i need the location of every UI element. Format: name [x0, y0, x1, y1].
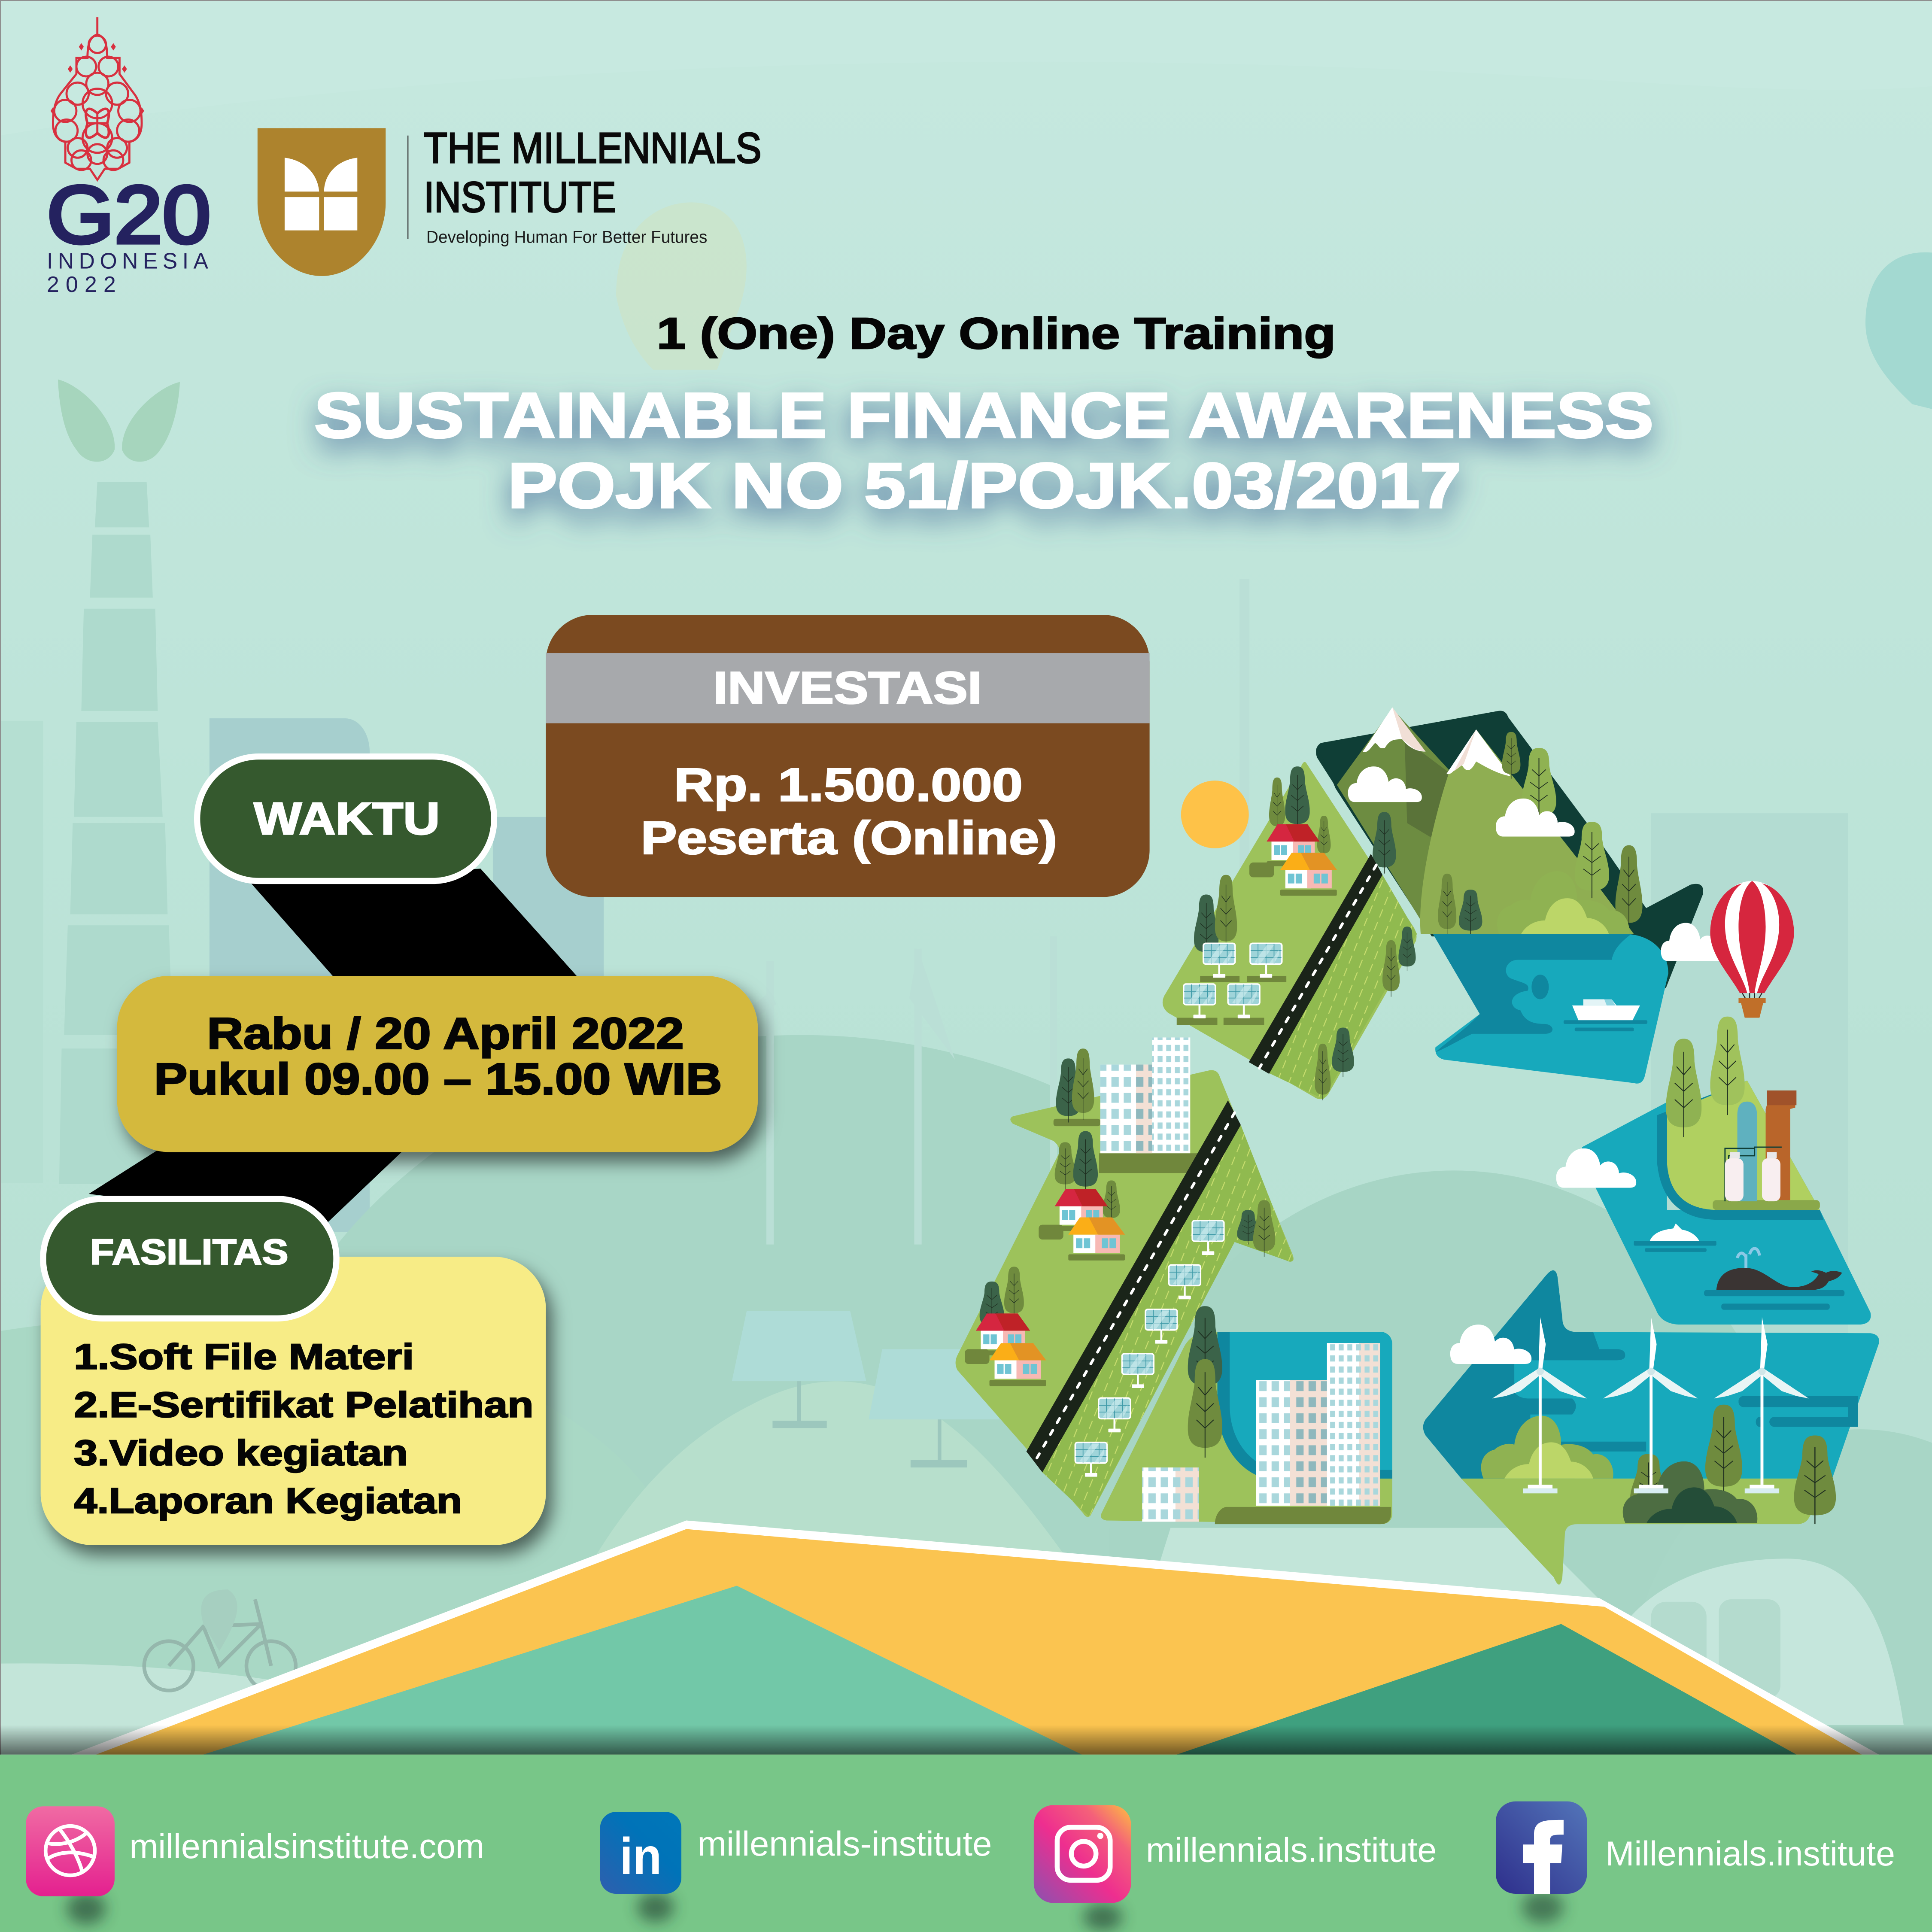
arrow: wind farm — [1423, 1270, 1879, 1585]
water stripes — [1738, 1396, 1858, 1427]
social: facebook: Millennials.institute — [1605, 1835, 1895, 1873]
icon: dolphin — [1634, 1224, 1716, 1252]
background: car — [1602, 1558, 1904, 1725]
arrow: hillside with road — [1163, 762, 1417, 1100]
lake — [1433, 934, 1668, 1084]
background: smokestack and leaves — [58, 380, 180, 1184]
panel: investasi — [546, 615, 1150, 897]
label: waktu: WAKTU — [254, 793, 440, 844]
foreground mountains — [71, 1520, 1879, 1755]
icon: whale — [1704, 1249, 1844, 1310]
block: city by the water — [1101, 1306, 1392, 1524]
icon: hot air balloon — [1710, 881, 1794, 1018]
participant type: Peserta (Online) — [641, 812, 1057, 864]
social: website: millennialsinstitute.com — [129, 1827, 484, 1866]
social: linkedin: in — [620, 1827, 662, 1885]
icon: sun — [1181, 781, 1249, 848]
background: bicycle — [144, 1589, 296, 1691]
fasilitas pill — [43, 1199, 336, 1318]
Millennials Institute logo — [258, 124, 762, 276]
social: instagram — [1034, 1805, 1437, 1931]
background: hot air balloon — [1865, 252, 1932, 409]
background: wind turbines — [653, 579, 1249, 1245]
social: instagram: millennials.institute — [1146, 1831, 1437, 1869]
subtitle: 1 (One) Day Online Training — [657, 308, 1336, 358]
facilities list: 1.Soft File Materi — [74, 1337, 414, 1376]
price: Rp. 1.500.000 — [674, 759, 1023, 811]
fasilitas pill: FASILITAS — [90, 1232, 289, 1272]
background: sun glow — [616, 202, 747, 370]
facilities list: 4.Laporan Kegiatan — [74, 1481, 462, 1521]
trees — [1194, 766, 1416, 1100]
panel: fasilitas — [41, 1199, 546, 1545]
icon: camera — [1057, 1827, 1110, 1880]
social: website — [26, 1806, 484, 1925]
tagline: Developing Human For Better Futures — [426, 227, 707, 246]
wordmark line one: THE MILLENNIALS — [424, 124, 762, 172]
main title: SUSTAINABLE FINANCE AWARENESS — [314, 380, 1653, 451]
background: hills — [0, 1035, 1932, 1932]
tower buildings — [1054, 1037, 1210, 1173]
background: buildings — [0, 718, 1848, 1343]
mountains — [1337, 707, 1634, 934]
land with factory — [1657, 1017, 1823, 1220]
label: waktu — [197, 756, 494, 881]
arrow: road and city — [956, 1037, 1294, 1517]
trees — [980, 1048, 1275, 1331]
social: linkedin — [600, 1812, 992, 1922]
background: solar panels — [732, 1311, 999, 1467]
footer shadow — [0, 1725, 1932, 1755]
icon: solar panels — [1075, 1221, 1224, 1477]
facilities list: 2.E-Sertifikat Pelatihan — [74, 1385, 534, 1425]
icon: boat — [1572, 999, 1640, 1020]
date: Rabu / 20 April 2022 — [207, 1008, 684, 1058]
icon: houses — [1249, 824, 1337, 896]
G20 wordmark: G20 — [47, 170, 211, 260]
Indonesia label: INDONESIA — [47, 249, 209, 273]
icon: gold shield — [258, 128, 386, 276]
icon: G20 batik ornament — [51, 17, 144, 180]
arrow: sea with whale and factory — [1582, 1017, 1871, 1324]
social: linkedin: millennials-institute — [697, 1825, 992, 1863]
wordmark line two: INSTITUTE — [424, 173, 616, 222]
icon: solar panels — [1177, 943, 1286, 1025]
connector: waktu to schedule — [250, 869, 577, 976]
footer band — [0, 1755, 1932, 1932]
facilities list — [74, 1337, 534, 1521]
bushes — [1481, 1405, 1836, 1524]
year label: 2022 — [47, 272, 116, 297]
main title — [314, 380, 1653, 521]
panel: schedule — [117, 976, 758, 1152]
connector: schedule to fasilitas — [89, 1151, 403, 1222]
G20 Indonesia logo — [47, 17, 211, 297]
icon: houses — [965, 1189, 1125, 1386]
recycling illustration — [956, 707, 1879, 1585]
social: facebook — [1496, 1801, 1895, 1923]
investasi heading: INVESTASI — [714, 662, 982, 714]
icon: wind turbines — [1492, 1317, 1809, 1493]
icon: dribbble — [46, 1826, 95, 1875]
icon: clouds — [1348, 766, 1732, 1364]
facilities list: 3.Video kegiatan — [74, 1433, 408, 1473]
arrow: mountain and lake — [1316, 707, 1703, 1084]
trees — [1373, 732, 1643, 935]
time: Pukul 09.00 – 15.00 WIB — [154, 1054, 722, 1103]
main title: POJK NO 51/POJK.03/2017 — [507, 450, 1461, 521]
